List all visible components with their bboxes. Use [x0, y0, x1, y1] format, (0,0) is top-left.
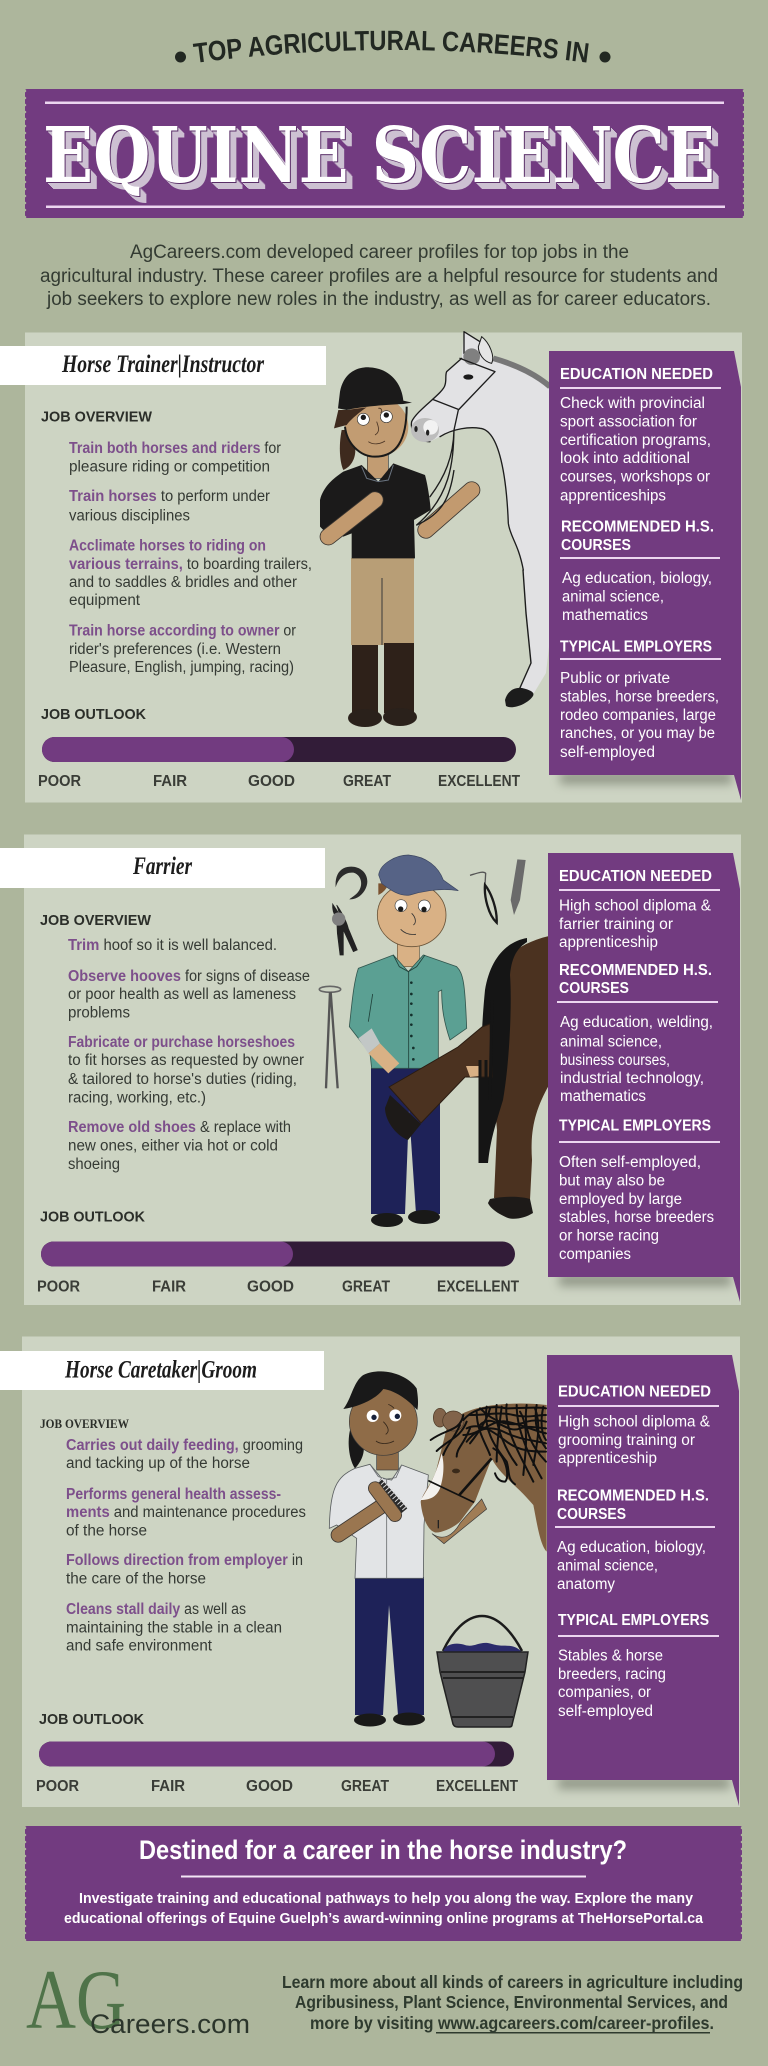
curved heading: TOP AGRICULTURAL CAREERS IN: [192, 30, 589, 62]
job overview: JOB OVERVIEW: [41, 408, 153, 426]
job outlook scale: EXCELLENT: [436, 1778, 518, 1795]
call to action banner: Investigate training and educational pathways to help you along the way. Explore the many: [79, 1891, 693, 1907]
call to action banner: educational offerings of Equine Guelph’s award-winning online programs at TheHorsePortal.ca: [64, 1911, 704, 1927]
purple info panel: High school diploma &: [558, 1414, 711, 1430]
purple info panel: grooming training or: [558, 1432, 695, 1449]
job overview: various disciplines: [69, 508, 190, 524]
job overview: new ones, either via hot or cold: [68, 1138, 278, 1154]
panel title band: Horse Trainer|Instructor: [61, 351, 264, 378]
job overview: rider's preferences (i.e. Western: [69, 641, 281, 658]
job overview: equipment: [69, 592, 141, 609]
job overview: Remove old shoes & replace with: [68, 1119, 291, 1136]
job overview: ments and maintenance procedures: [66, 1504, 306, 1521]
job overview: and safe environment: [66, 1638, 213, 1654]
job overview: Performs general health assess-: [66, 1486, 281, 1503]
call to action banner: [25, 1826, 742, 1941]
job outlook scale: GREAT: [341, 1778, 389, 1795]
job overview: Follows direction from employer in: [66, 1552, 303, 1569]
purple info panel: Ag education, welding,: [560, 1014, 713, 1031]
purple info panel: courses, workshops or: [560, 468, 710, 486]
job outlook scale: GOOD: [248, 773, 295, 790]
job outlook scale: POOR: [37, 1278, 80, 1296]
title banner: [25, 89, 744, 218]
purple info panel: COURSES: [557, 1506, 626, 1523]
job overview: Cleans stall daily as well as: [66, 1601, 246, 1618]
purple info panel: or horse racing: [559, 1228, 659, 1244]
purple info panel: breeders, racing: [558, 1666, 666, 1683]
job overview: racing, working, etc.): [68, 1090, 206, 1106]
purple info panel: business courses,: [560, 1052, 670, 1069]
job overview: and to saddles & bridles and other: [69, 574, 297, 591]
purple info panel: TYPICAL EMPLOYERS: [559, 1118, 711, 1134]
purple info panel: [549, 351, 741, 800]
intro text: [40, 242, 718, 310]
purple info panel: TYPICAL EMPLOYERS: [560, 638, 712, 656]
job overview: pleasure riding or competition: [69, 458, 270, 476]
purple info panel: mathematics: [562, 607, 648, 624]
job overview: Train both horses and riders for: [69, 440, 281, 457]
job outlook scale: POOR: [36, 1778, 79, 1795]
curved heading: [175, 30, 610, 62]
purple info panel: farrier training or: [559, 916, 673, 933]
purple info panel: stables, horse breeders: [559, 1209, 714, 1226]
job overview: [40, 1416, 306, 1654]
purple info panel: industrial technology,: [560, 1070, 704, 1087]
closing text: [282, 1972, 743, 2034]
panel title band: [0, 848, 325, 888]
job overview: or poor health as well as lameness: [68, 986, 296, 1003]
panel: horse caretaker: [0, 1336, 740, 1807]
illustration: white horse: [411, 332, 552, 707]
job overview: of the horse: [66, 1522, 147, 1540]
purple info panel: companies: [559, 1246, 631, 1263]
purple info panel: employed by large: [559, 1191, 682, 1208]
purple info panel: [548, 853, 740, 1302]
panel: farrier: [0, 834, 741, 1305]
illustration: farrier tools: [319, 859, 526, 1088]
purple info panel: Ag education, biology,: [562, 570, 712, 587]
purple info panel: Check with provincial: [560, 395, 705, 412]
purple info panel: Stables & horse: [558, 1648, 663, 1664]
job overview: JOB OVERVIEW: [40, 1416, 129, 1431]
purple info panel: High school diploma &: [559, 898, 712, 914]
purple info panel: Public or private: [560, 670, 670, 687]
closing text: more by visiting www.agcareers.com/career-profiles.: [310, 2013, 714, 2033]
closing text: Agribusiness, Plant Science, Environmental Services, and: [295, 1992, 728, 2012]
job overview: Pleasure, English, jumping, racing): [69, 659, 294, 676]
job outlook scale: JOB OUTLOOK: [40, 1208, 145, 1226]
purple info panel: EDUCATION NEEDED: [560, 366, 713, 383]
job outlook scale: EXCELLENT: [438, 773, 520, 790]
purple info panel: rodeo companies, large: [560, 707, 716, 724]
purple info panel: TYPICAL EMPLOYERS: [558, 1612, 709, 1629]
purple info panel: sport association for: [560, 414, 697, 430]
job overview: the care of the horse: [66, 1570, 206, 1588]
job outlook scale: [37, 1208, 519, 1296]
illustration: horse hindquarters: [480, 936, 549, 1219]
job overview: and tacking up of the horse: [66, 1455, 250, 1472]
job outlook scale: GREAT: [343, 773, 391, 790]
purple info panel: RECOMMENDED H.S.: [559, 962, 712, 979]
intro text: agricultural industry. These career profiles are a helpful resource for students and: [40, 266, 718, 287]
job overview: Trim hoof so it is well balanced.: [68, 937, 277, 954]
job overview: problems: [68, 1004, 130, 1022]
job outlook scale: GOOD: [246, 1778, 293, 1795]
purple info panel: RECOMMENDED H.S.: [557, 1488, 709, 1504]
logo: AgCareers.com: Careers.com: [90, 2009, 250, 2039]
purple info panel: apprenticeship: [558, 1450, 657, 1467]
job overview: JOB OVERVIEW: [40, 912, 152, 929]
job outlook scale: JOB OUTLOOK: [39, 1711, 144, 1728]
intro text: AgCareers.com developed career profiles for top jobs in the: [130, 242, 629, 263]
illustration: groom and horse: [329, 1371, 547, 1726]
purple info panel: COURSES: [559, 980, 629, 997]
purple info panel: look into additional: [560, 450, 690, 467]
job outlook scale: GREAT: [342, 1278, 390, 1296]
purple info panel: [547, 1355, 739, 1806]
purple info panel: ranches, or you may be: [560, 725, 715, 742]
job overview: maintaining the stable in a clean: [66, 1620, 282, 1636]
purple info panel: animal science,: [562, 588, 664, 606]
logo: AgCareers.com: AG: [26, 1953, 126, 2047]
job outlook scale: FAIR: [151, 1778, 185, 1795]
purple info panel: EDUCATION NEEDED: [558, 1384, 711, 1400]
intro text: job seekers to explore new roles in the industry, as well as for career educators.: [46, 289, 711, 310]
job overview: Fabricate or purchase horseshoes: [68, 1034, 295, 1051]
purple info panel: but may also be: [559, 1172, 665, 1190]
purple info panel: RECOMMENDED H.S.: [561, 518, 714, 536]
job overview: various terrains, to boarding trailers,: [69, 556, 312, 573]
job outlook scale: GOOD: [247, 1278, 294, 1296]
panel title band: [0, 1351, 324, 1390]
panel title band: Horse Caretaker|Groom: [64, 1356, 257, 1384]
job outlook scale: FAIR: [152, 1278, 186, 1296]
purple info panel: stables, horse breeders,: [560, 688, 719, 706]
job outlook scale: [38, 706, 520, 790]
illustration: rider: [320, 367, 472, 727]
job overview: [40, 912, 310, 1173]
purple info panel: mathematics: [560, 1088, 646, 1105]
panel title band: Farrier: [132, 853, 192, 880]
purple info panel: EDUCATION NEEDED: [559, 868, 712, 885]
job overview: Train horse according to owner or: [69, 622, 296, 640]
purple info panel: anatomy: [557, 1576, 615, 1593]
job overview: shoeing: [68, 1156, 120, 1173]
purple info panel: Ag education, biology,: [557, 1539, 706, 1556]
purple info panel: apprenticeships: [560, 488, 666, 504]
purple info panel: apprenticeship: [559, 934, 658, 951]
purple info panel: self-employed: [558, 1703, 653, 1720]
job outlook scale: JOB OUTLOOK: [41, 706, 146, 723]
job overview: Carries out daily feeding, grooming: [66, 1437, 303, 1454]
job overview: Train horses to perform under: [69, 488, 270, 505]
purple info panel: animal science,: [557, 1558, 658, 1574]
job outlook scale: EXCELLENT: [437, 1278, 519, 1296]
logo: AgCareers.com: [26, 1953, 250, 2047]
panel: horse trainer: [0, 332, 742, 802]
panel title band: [0, 346, 326, 385]
job overview: & tailored to horse's duties (riding,: [68, 1071, 297, 1088]
purple info panel: COURSES: [561, 537, 631, 554]
job overview: [41, 408, 312, 676]
purple info panel: animal science,: [560, 1034, 662, 1050]
purple info panel: Often self-employed,: [559, 1154, 701, 1171]
job outlook scale: [36, 1711, 518, 1795]
icon: bucket: [437, 1616, 528, 1727]
job overview: Observe hooves for signs of disease: [68, 968, 310, 985]
job overview: to fit horses as requested by owner: [68, 1052, 304, 1069]
call to action banner: Destined for a career in the horse industry?: [139, 1835, 627, 1865]
job outlook scale: FAIR: [153, 773, 187, 790]
job overview: Acclimate horses to riding on: [69, 538, 266, 554]
purple info panel: companies, or: [558, 1684, 651, 1701]
purple info panel: certification programs,: [560, 432, 711, 449]
job outlook scale: POOR: [38, 773, 81, 790]
illustration: farrier: [349, 855, 492, 1227]
purple info panel: self-employed: [560, 744, 655, 761]
